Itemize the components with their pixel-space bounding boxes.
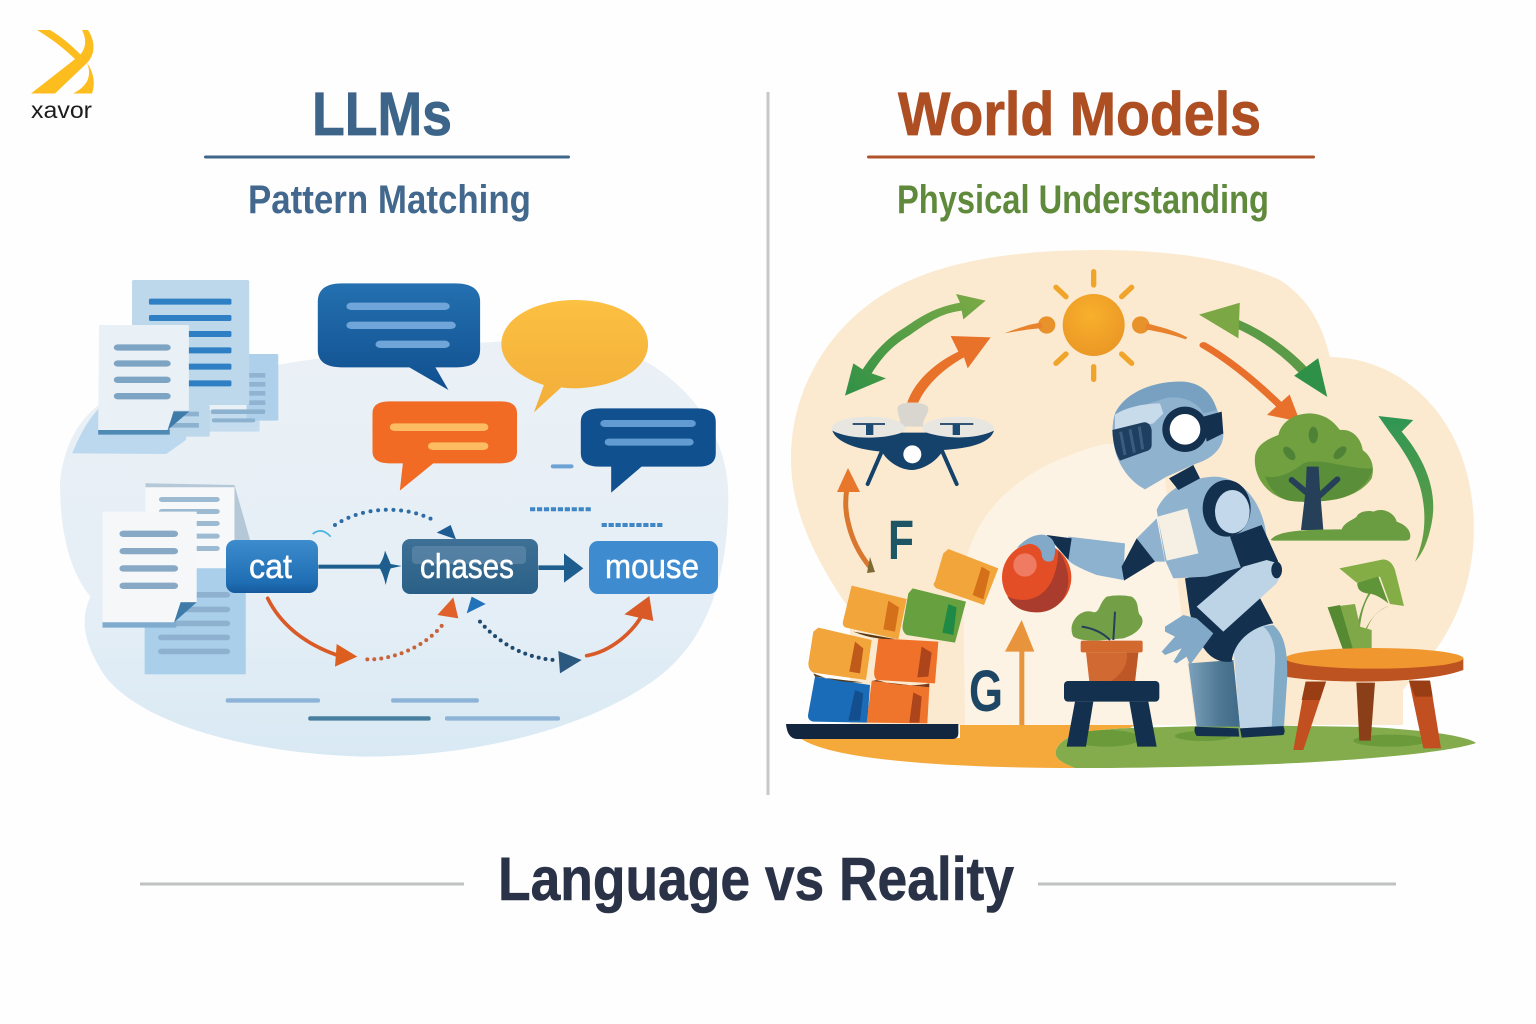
word box: cat: cat bbox=[249, 548, 293, 586]
robot far arm bbox=[1017, 535, 1155, 581]
subheading: Pattern Matching: Pattern Matching bbox=[248, 178, 531, 222]
subheading: Physical Understanding: Physical Understanding bbox=[897, 178, 1269, 222]
word box: chases bbox=[402, 539, 538, 594]
speech bubble: dark blue large bbox=[318, 283, 480, 390]
orange arrow: sun to tree bbox=[1204, 345, 1300, 422]
label: force F: F bbox=[888, 508, 914, 571]
ground bbox=[800, 725, 1476, 768]
orange arrow: to mouse bbox=[587, 596, 653, 656]
documents: upper stack bbox=[98, 280, 278, 437]
heading: World Models: World Models bbox=[898, 80, 1261, 148]
orange arrow: cat curve bbox=[268, 598, 357, 667]
speech bubble: dark blue small bbox=[581, 408, 716, 493]
orange arrow: drone to sun bbox=[907, 336, 991, 403]
speech bubble: orange bbox=[372, 401, 517, 491]
orange double arrow: left bbox=[837, 468, 875, 573]
panel: World Models illustration bbox=[786, 250, 1476, 768]
heading: LLMs: LLMs bbox=[312, 80, 452, 148]
arrow: gravity up bbox=[1005, 620, 1034, 725]
robot torso bbox=[1137, 465, 1273, 662]
green arc arrow bbox=[1378, 416, 1433, 562]
documents: lower stack bbox=[103, 483, 250, 674]
potted plant bbox=[1072, 595, 1143, 682]
logo: xavor bbox=[31, 30, 94, 123]
speech bubble: yellow bbox=[501, 300, 648, 412]
icon: drone bbox=[832, 403, 994, 484]
robot legs bbox=[1175, 625, 1287, 741]
word box: mouse: mouse bbox=[605, 548, 699, 586]
arrow: chases to mouse bbox=[538, 553, 583, 583]
tree bbox=[1255, 413, 1373, 530]
icon: sun bbox=[1004, 272, 1187, 379]
stool bbox=[1064, 681, 1159, 747]
word box: cat bbox=[226, 540, 318, 593]
word box: mouse bbox=[589, 541, 718, 594]
arrow: cat to chases bbox=[318, 551, 402, 585]
robot near arm bbox=[1162, 525, 1282, 665]
bush bbox=[1271, 510, 1410, 541]
ball bbox=[1002, 543, 1071, 612]
table bbox=[1285, 648, 1463, 750]
table plant bbox=[1328, 559, 1404, 651]
green double arrow: right bbox=[1199, 303, 1327, 397]
footer heading: Language vs Reality: Language vs Reality bbox=[498, 845, 1014, 913]
robot head bbox=[1112, 382, 1223, 489]
blocks stack bbox=[786, 549, 998, 739]
robot, ball, pot and stool bbox=[1002, 382, 1287, 747]
word box: chases: chases bbox=[420, 548, 514, 586]
dotted arc arrow: cat to chases bbox=[313, 510, 456, 539]
logo: xavor: xavor bbox=[31, 97, 92, 123]
label: gravity G: G bbox=[969, 659, 1003, 724]
green double arrow: left bbox=[845, 294, 986, 396]
tree, bush, table and plant bbox=[1255, 413, 1463, 750]
orange dotted arrow bbox=[367, 597, 458, 659]
dark dotted arrow bbox=[467, 597, 582, 673]
panel: LLM illustration bbox=[60, 280, 728, 757]
footer heading: Language vs Reality bbox=[140, 845, 1396, 913]
